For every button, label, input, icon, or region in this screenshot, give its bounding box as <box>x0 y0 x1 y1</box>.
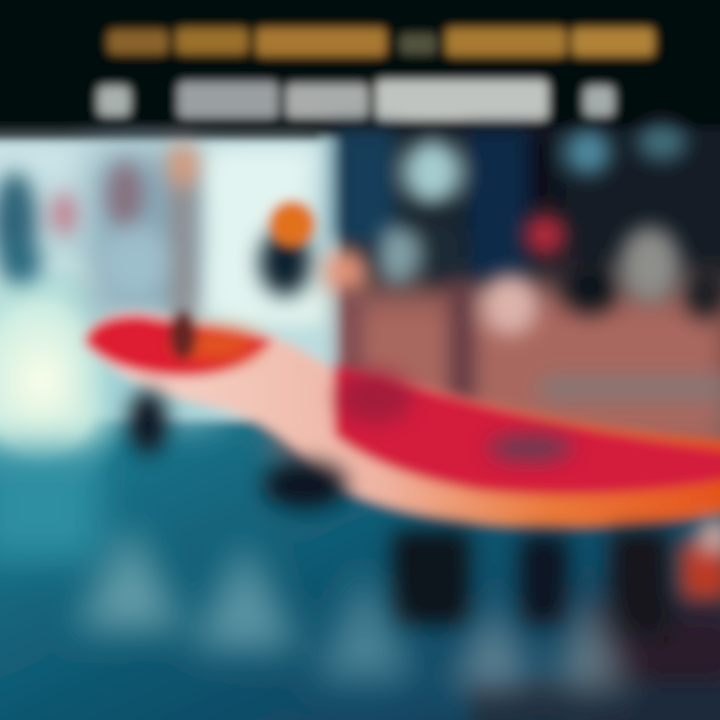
heading: orange title bar <box>108 28 654 56</box>
right edge red object <box>680 520 720 600</box>
icon: orange ball on dark figure <box>259 201 367 296</box>
figures on the left <box>0 143 199 320</box>
floor reflections <box>75 525 630 690</box>
dark columns <box>335 124 686 280</box>
heading: white subtitle bar <box>98 80 614 120</box>
table: red surface with salmon edge <box>85 311 720 527</box>
panel: bright left wall <box>0 146 325 560</box>
top dark band <box>0 0 720 128</box>
table legs and shadows <box>128 390 670 635</box>
figures on the right <box>340 214 720 405</box>
